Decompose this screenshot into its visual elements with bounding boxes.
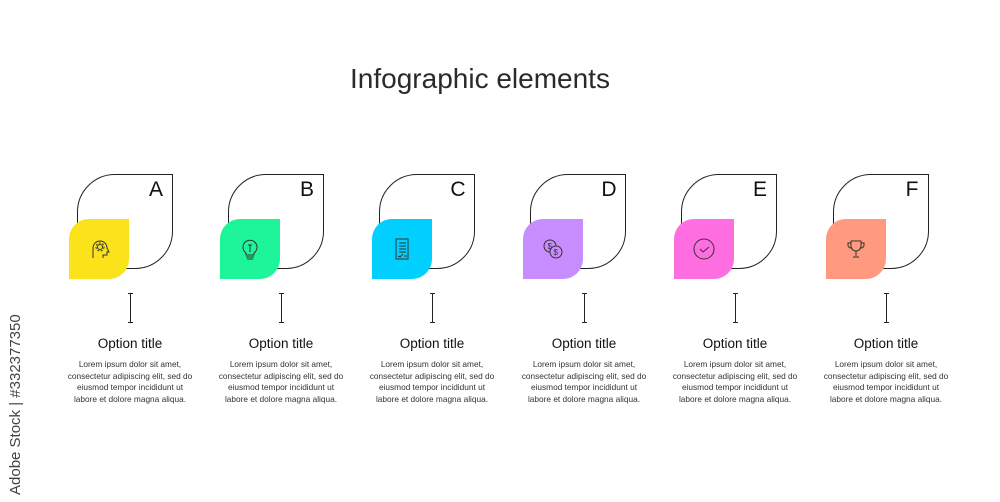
letter B: B xyxy=(300,178,314,201)
text A: Lorem ipsum dolor sit amet, xyxy=(79,359,181,369)
arrow D xyxy=(584,293,585,323)
text A: Option title xyxy=(98,336,162,351)
text F: consectetur adipiscing elit, sed do xyxy=(824,371,948,381)
text D: Option title xyxy=(552,336,616,351)
text B: Lorem ipsum dolor sit amet, xyxy=(230,359,332,369)
icon: head with gear xyxy=(69,219,129,279)
text D xyxy=(522,336,646,404)
text F: eiusmod tempor incididunt ut xyxy=(833,382,939,392)
text C: labore et dolore magna aliqua. xyxy=(376,394,488,404)
text E: labore et dolore magna aliqua. xyxy=(679,394,791,404)
text D: labore et dolore magna aliqua. xyxy=(528,394,640,404)
icon: coins xyxy=(523,219,583,279)
icon: document xyxy=(372,219,432,279)
text F: labore et dolore magna aliqua. xyxy=(830,394,942,404)
step C outline xyxy=(379,174,475,269)
text C: consectetur adipiscing elit, sed do xyxy=(370,371,494,381)
arrow E xyxy=(735,293,736,323)
text F: Option title xyxy=(854,336,918,351)
text D: Lorem ipsum dolor sit amet, xyxy=(533,359,635,369)
text E: Option title xyxy=(703,336,767,351)
text A: eiusmod tempor incididunt ut xyxy=(77,382,183,392)
text B xyxy=(219,336,343,404)
text A: consectetur adipiscing elit, sed do xyxy=(68,371,192,381)
title: Infographic elements xyxy=(350,63,610,94)
icon: bulb xyxy=(220,219,280,279)
step F outline xyxy=(833,174,929,269)
letter D: D xyxy=(601,178,617,201)
text B: Option title xyxy=(249,336,313,351)
icon: coins: $ xyxy=(554,248,558,257)
text B: eiusmod tempor incididunt ut xyxy=(228,382,334,392)
text F xyxy=(824,336,948,404)
text B: consectetur adipiscing elit, sed do xyxy=(219,371,343,381)
text C xyxy=(370,336,494,404)
text D: eiusmod tempor incididunt ut xyxy=(531,382,637,392)
icon: clock xyxy=(674,219,734,279)
icon: trophy xyxy=(826,219,886,279)
text E xyxy=(673,336,797,404)
arrow C xyxy=(432,293,433,323)
arrow F xyxy=(886,293,887,323)
text E: eiusmod tempor incididunt ut xyxy=(682,382,788,392)
text E: consectetur adipiscing elit, sed do xyxy=(673,371,797,381)
text C: Option title xyxy=(400,336,464,351)
text C: eiusmod tempor incididunt ut xyxy=(379,382,485,392)
text F: Lorem ipsum dolor sit amet, xyxy=(835,359,937,369)
text C: Lorem ipsum dolor sit amet, xyxy=(381,359,483,369)
text A xyxy=(68,336,192,404)
arrow B xyxy=(281,293,282,323)
arrow A xyxy=(130,293,131,323)
text D: consectetur adipiscing elit, sed do xyxy=(522,371,646,381)
letter A: A xyxy=(149,178,163,201)
text A: labore et dolore magna aliqua. xyxy=(74,394,186,404)
letter F: F xyxy=(906,178,918,201)
step B outline xyxy=(228,174,324,269)
text B: labore et dolore magna aliqua. xyxy=(225,394,337,404)
text E: Lorem ipsum dolor sit amet, xyxy=(684,359,786,369)
icon: coins: $ xyxy=(548,242,552,251)
step D outline xyxy=(530,174,626,269)
letter C: C xyxy=(450,178,466,201)
watermark text: Adobe Stock | #332377350 xyxy=(7,314,24,495)
step E outline xyxy=(681,174,777,269)
step A outline xyxy=(77,174,173,269)
letter E: E xyxy=(753,178,767,201)
